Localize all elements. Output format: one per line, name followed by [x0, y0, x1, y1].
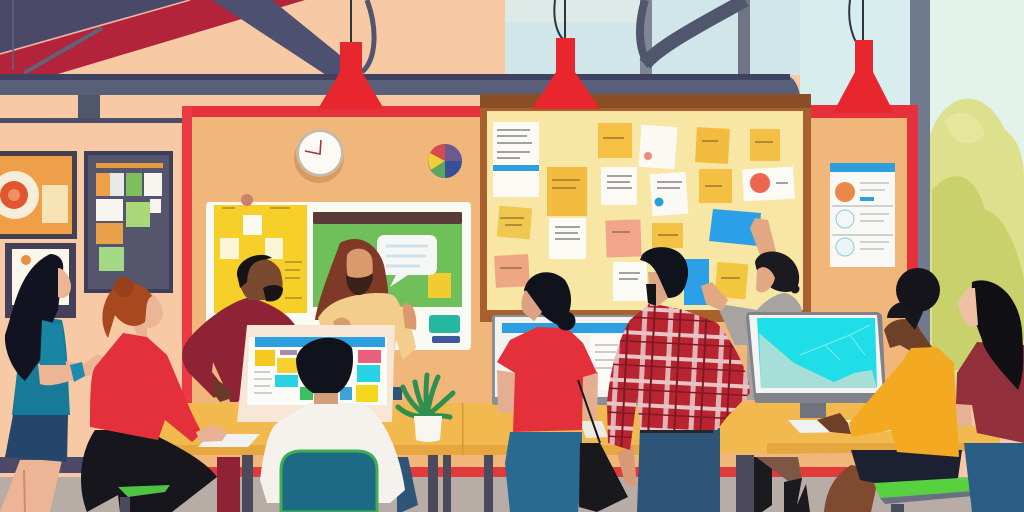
man in plaid shirt — [607, 247, 750, 512]
yellow sticky on slide — [428, 273, 451, 298]
cork board — [480, 94, 811, 322]
teal chair back — [281, 451, 377, 512]
blue note — [684, 259, 709, 305]
center monitor behind woman — [492, 315, 641, 405]
left center desk monitor — [237, 325, 395, 422]
paper documents — [493, 122, 795, 301]
green stool left — [118, 485, 170, 512]
green stool right — [874, 477, 986, 512]
blue envelope — [709, 209, 761, 246]
woman in maroon top, far right — [956, 280, 1024, 512]
potted plant — [398, 375, 453, 442]
left wall posters — [0, 151, 173, 318]
woman in yellow sweater with curly hair — [817, 268, 962, 512]
keyboards — [198, 420, 897, 447]
desks — [133, 403, 1000, 512]
right info poster — [830, 163, 895, 267]
man seated at desk, white shirt — [260, 338, 405, 503]
presenter with beard — [315, 239, 416, 360]
speech bubble — [377, 235, 437, 287]
right monitor with map — [746, 312, 886, 418]
red frame and orange board — [182, 105, 918, 467]
yellow kanban board — [214, 205, 307, 313]
poster: small framed picture — [5, 243, 76, 318]
lamp left — [318, 0, 384, 109]
sticky notes — [494, 123, 780, 299]
poster: dark pin board — [84, 151, 173, 293]
woman in red tee with bag — [497, 272, 628, 512]
pie chart wall dial — [428, 144, 462, 178]
man in maroon shirt with beard — [182, 255, 295, 512]
pushpin above screen — [241, 194, 253, 206]
poster: spiral chart — [0, 151, 77, 239]
woman in red shirt with ponytail — [81, 277, 228, 512]
jeans of seated man — [393, 387, 418, 512]
woman in gray, legs below desk — [754, 457, 810, 512]
woman in teal shirt, far left — [0, 254, 106, 512]
ceiling lamps — [318, 0, 894, 113]
windows and trees — [505, 0, 1024, 400]
roof trusses — [0, 0, 745, 75]
woman in gray writing on wall — [701, 218, 802, 400]
green slide — [313, 212, 462, 343]
lamp center — [532, 0, 600, 109]
wall clock — [294, 129, 344, 183]
lamp right — [833, 0, 894, 113]
overhead pipe — [0, 74, 800, 123]
presentation screen — [206, 202, 471, 350]
